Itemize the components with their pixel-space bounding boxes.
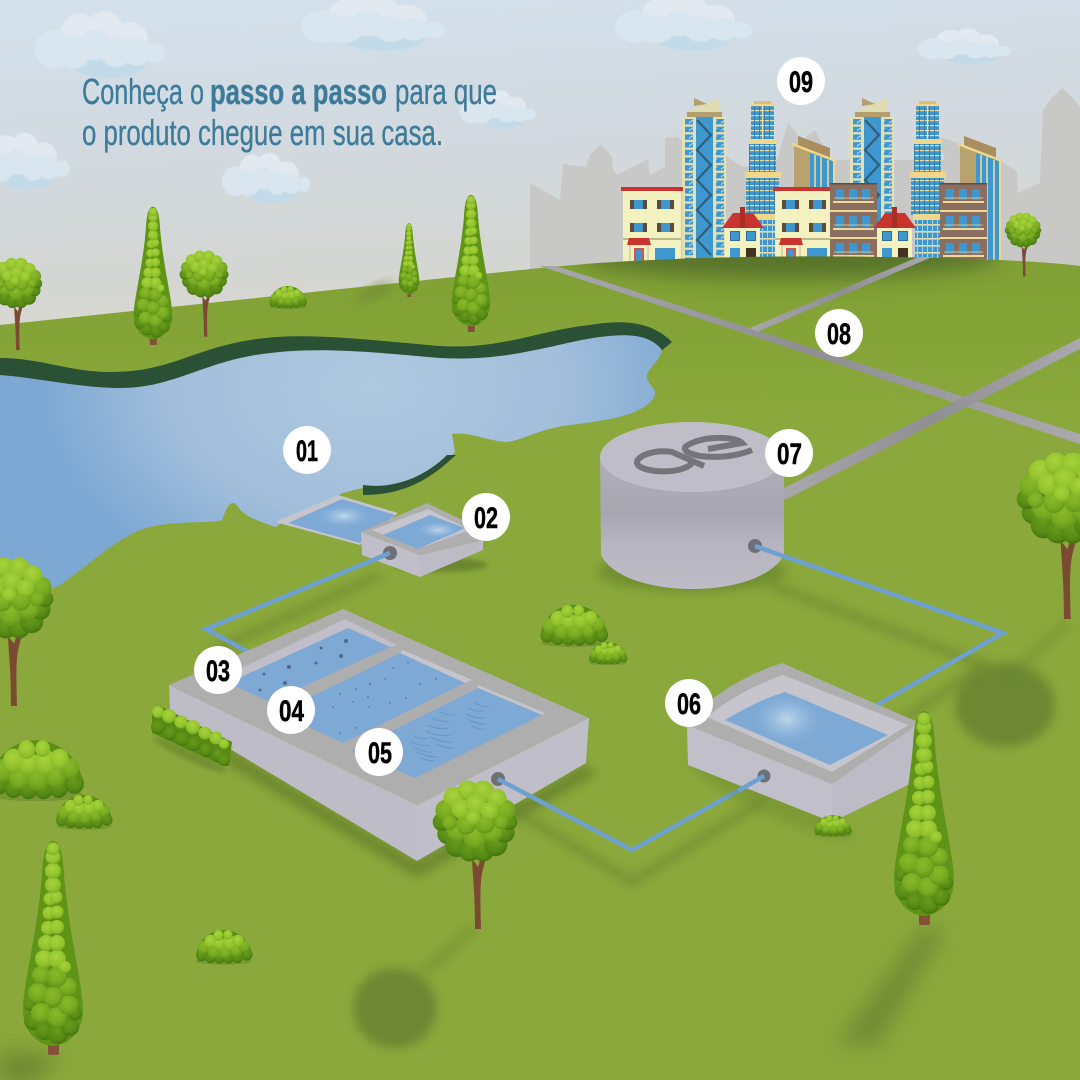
ground bbox=[0, 256, 1080, 1080]
badge 03: 03 bbox=[206, 655, 230, 688]
badge 09: 09 bbox=[789, 66, 813, 99]
title: Conheça o bbox=[82, 71, 204, 112]
logo bbox=[637, 438, 752, 471]
city hill shadow bbox=[582, 256, 1000, 288]
badge 06 bbox=[665, 679, 713, 727]
badge 01 bbox=[283, 426, 331, 474]
water ripples bbox=[410, 703, 490, 761]
hedge bbox=[151, 706, 232, 777]
pipe 07 to 06 bbox=[755, 546, 1003, 705]
city skyline silhouette bbox=[530, 88, 1080, 290]
roads bbox=[540, 257, 1080, 500]
basin outlet bbox=[491, 772, 505, 786]
lake inner shore band bbox=[363, 455, 456, 495]
intake pool 01 bbox=[275, 495, 398, 545]
badge 03 bbox=[194, 646, 242, 694]
pipe 02 to 03 bbox=[206, 553, 390, 652]
badge 06: 06 bbox=[677, 688, 701, 721]
large basin shadow bbox=[170, 713, 596, 878]
title bbox=[82, 71, 497, 153]
badge 02 bbox=[462, 493, 510, 541]
round trees bbox=[0, 213, 1080, 929]
pipe 05 to 06 bbox=[498, 776, 764, 850]
bushes bbox=[0, 286, 852, 965]
reservoir 07 bbox=[597, 422, 787, 592]
pipe shadows bbox=[215, 575, 985, 882]
tank 02 outlet bbox=[362, 546, 397, 565]
lake bbox=[0, 335, 662, 610]
title: para que bbox=[395, 71, 497, 112]
badge 05 bbox=[355, 728, 403, 776]
tank 06 bbox=[683, 663, 920, 851]
badge 08 bbox=[815, 309, 863, 357]
title: o produto chegue em sua casa. bbox=[82, 112, 443, 153]
ground shadows bbox=[0, 278, 1072, 1080]
tank 02 bbox=[361, 503, 488, 577]
background sky bbox=[0, 0, 1080, 340]
fine sediment dots bbox=[332, 662, 437, 734]
basin 03 04 05 bbox=[169, 609, 589, 861]
badge 08: 08 bbox=[827, 318, 851, 351]
badge 05: 05 bbox=[368, 737, 392, 770]
badge 04: 04 bbox=[279, 695, 304, 728]
badge 07: 07 bbox=[777, 438, 802, 471]
city buildings bbox=[621, 98, 1002, 262]
badge 07 bbox=[765, 429, 813, 477]
coarse sediment dots bbox=[258, 639, 348, 692]
badge 02: 02 bbox=[474, 502, 498, 535]
badge 09 bbox=[777, 57, 825, 105]
clouds bbox=[0, 0, 1011, 203]
badge 01: 01 bbox=[296, 435, 318, 468]
badge 04 bbox=[267, 686, 315, 734]
cypress trees bbox=[23, 195, 954, 1055]
lake shore dark edge bbox=[0, 322, 672, 400]
title: passo a passo bbox=[210, 71, 387, 112]
